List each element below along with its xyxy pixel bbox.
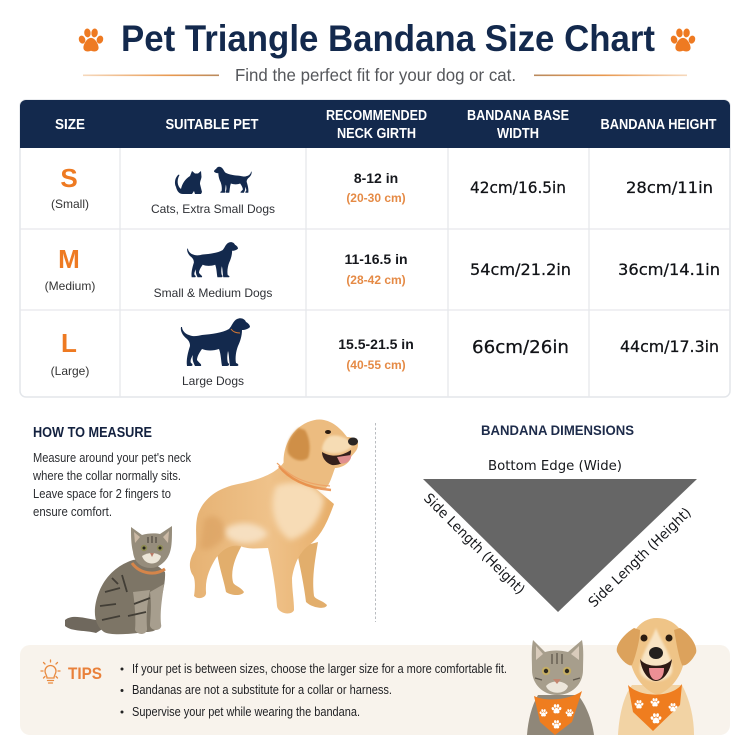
- collar: [279, 466, 331, 490]
- neck girth: 11-16.5 in: [344, 251, 408, 267]
- divider: [374, 423, 376, 622]
- right side label: Side Length (Height): [586, 505, 695, 611]
- mouth: [640, 659, 672, 681]
- photo: cat with bandana: [527, 640, 594, 735]
- icon: large dog silhouette: [181, 318, 250, 366]
- mouth: [322, 450, 351, 465]
- icon: small dog silhouette: [214, 167, 252, 193]
- subtitle: Find the perfect fit for your dog or cat.: [235, 65, 516, 85]
- bandana paws: [539, 704, 574, 728]
- tips list: Supervise your pet while wearing the bandana.: [132, 705, 360, 719]
- instructions: Leave space for 2 fingers to: [33, 486, 171, 501]
- eyes: [542, 667, 550, 675]
- ear: [287, 428, 310, 460]
- body: [527, 695, 594, 735]
- title: Pet Triangle Bandana Size Chart: [121, 18, 655, 59]
- icon: light bulb: [41, 660, 60, 683]
- header labels: BANDANA HEIGHT: [600, 117, 717, 133]
- tongue: [337, 455, 351, 463]
- height: 28cm/11in: [626, 178, 713, 197]
- neck girth: 8-12 in: [354, 170, 398, 186]
- instructions: [32, 450, 191, 519]
- nose: [348, 438, 358, 446]
- header labels: BANDANA BASE: [467, 108, 569, 124]
- photo: tabby cat: [65, 526, 172, 634]
- tongue: [649, 668, 664, 680]
- row: medium: (28-42 cm): [346, 273, 406, 287]
- tips list: Bandanas are not a substitute for a collar or harness.: [132, 683, 392, 697]
- far hind leg and far front leg: [216, 542, 327, 608]
- nose: [649, 647, 663, 659]
- photo: golden retriever: [190, 419, 358, 613]
- height: 36cm/14.1in: [618, 260, 720, 279]
- tips background: [20, 645, 730, 735]
- nose: [553, 679, 561, 684]
- row: large: (40-55 cm): [346, 358, 406, 372]
- tips list: [120, 662, 507, 719]
- eyes: [640, 634, 648, 642]
- body: [95, 560, 165, 634]
- nose: [150, 553, 154, 557]
- panel: bandana dimensions: [420, 422, 697, 612]
- header labels: SIZE: [55, 117, 85, 133]
- icon: medium dog silhouette: [187, 242, 238, 277]
- row: small: [51, 163, 713, 216]
- tips heading: TIPS: [68, 664, 102, 683]
- chest highlight: [272, 483, 324, 540]
- pet label: Cats, Extra Small Dogs: [151, 202, 275, 216]
- flank highlight: [226, 523, 268, 543]
- collar: [132, 563, 165, 573]
- left side label: Side Length (Height): [420, 491, 528, 598]
- heading: HOW TO MEASURE: [33, 425, 152, 441]
- row: small: (Small): [51, 197, 89, 211]
- height: 44cm/17.3in: [620, 337, 719, 356]
- eye: [325, 430, 331, 434]
- header labels: SUITABLE PET: [166, 117, 259, 133]
- legs: [133, 584, 164, 634]
- head: [532, 640, 583, 695]
- neck girth: 15.5-21.5 in: [338, 336, 414, 352]
- row: medium: [45, 242, 720, 300]
- size S: S: [60, 163, 78, 193]
- subtitle right rule: [534, 74, 687, 76]
- body: [618, 685, 694, 735]
- base width: 54cm/21.2in: [470, 260, 571, 279]
- head: [131, 526, 172, 568]
- header labels: [55, 108, 717, 142]
- body: [190, 462, 334, 613]
- icon: left paw: [78, 28, 104, 51]
- face: [142, 553, 161, 564]
- row: small: (20-30 cm): [346, 191, 406, 205]
- base width: 42cm/16.5in: [470, 178, 566, 197]
- panel: how to measure: [32, 419, 358, 634]
- head: [284, 419, 358, 488]
- size L: L: [61, 328, 77, 358]
- table header bar: [20, 100, 730, 148]
- forehead stripes: [148, 536, 156, 543]
- blaze and muzzle: [640, 628, 672, 681]
- dark stripes: [100, 575, 150, 620]
- bottom edge label: Bottom Edge (Wide): [488, 458, 622, 474]
- eyes: [141, 545, 147, 551]
- tail: [65, 617, 104, 633]
- base width: 66cm/26in: [472, 337, 569, 358]
- tips list: If your pet is between sizes, choose the larger size for a more comfortable fit.: [132, 662, 507, 676]
- triangle diagram: [423, 479, 697, 612]
- panel: size table: [20, 100, 730, 397]
- pet label: Large Dogs: [182, 374, 244, 388]
- table body: [20, 100, 730, 397]
- muzzle: [546, 682, 568, 693]
- instructions: Measure around your pet's neck: [33, 450, 191, 465]
- orange bandana: [628, 684, 682, 731]
- instructions: where the collar normally sits.: [32, 468, 181, 483]
- orange bandana: [534, 691, 582, 735]
- row: medium: (Medium): [45, 279, 95, 293]
- header labels: RECOMMENDED: [326, 108, 427, 124]
- header labels: WIDTH: [497, 126, 539, 142]
- icon: cat silhouette: [175, 171, 202, 194]
- ear inners: [134, 531, 169, 543]
- panel: tips: [20, 618, 730, 735]
- belly shadow: [200, 516, 226, 550]
- instructions: ensure comfort.: [33, 504, 112, 519]
- bandana paws: [634, 698, 678, 723]
- pet label: Small & Medium Dogs: [154, 286, 272, 300]
- head: [629, 618, 686, 695]
- icon: right paw: [670, 28, 696, 51]
- forehead stripes: [535, 653, 580, 680]
- subtitle left rule: [83, 74, 219, 76]
- heading: BANDANA DIMENSIONS: [481, 422, 634, 438]
- ears: [617, 628, 696, 666]
- size M: M: [58, 244, 80, 274]
- row: large: [51, 318, 719, 388]
- photo: dog with bandana: [617, 618, 696, 735]
- row: large: (Large): [51, 364, 89, 378]
- header labels: NECK GIRTH: [337, 126, 416, 142]
- ear inners: [536, 646, 579, 660]
- muzzle highlight: [322, 435, 352, 453]
